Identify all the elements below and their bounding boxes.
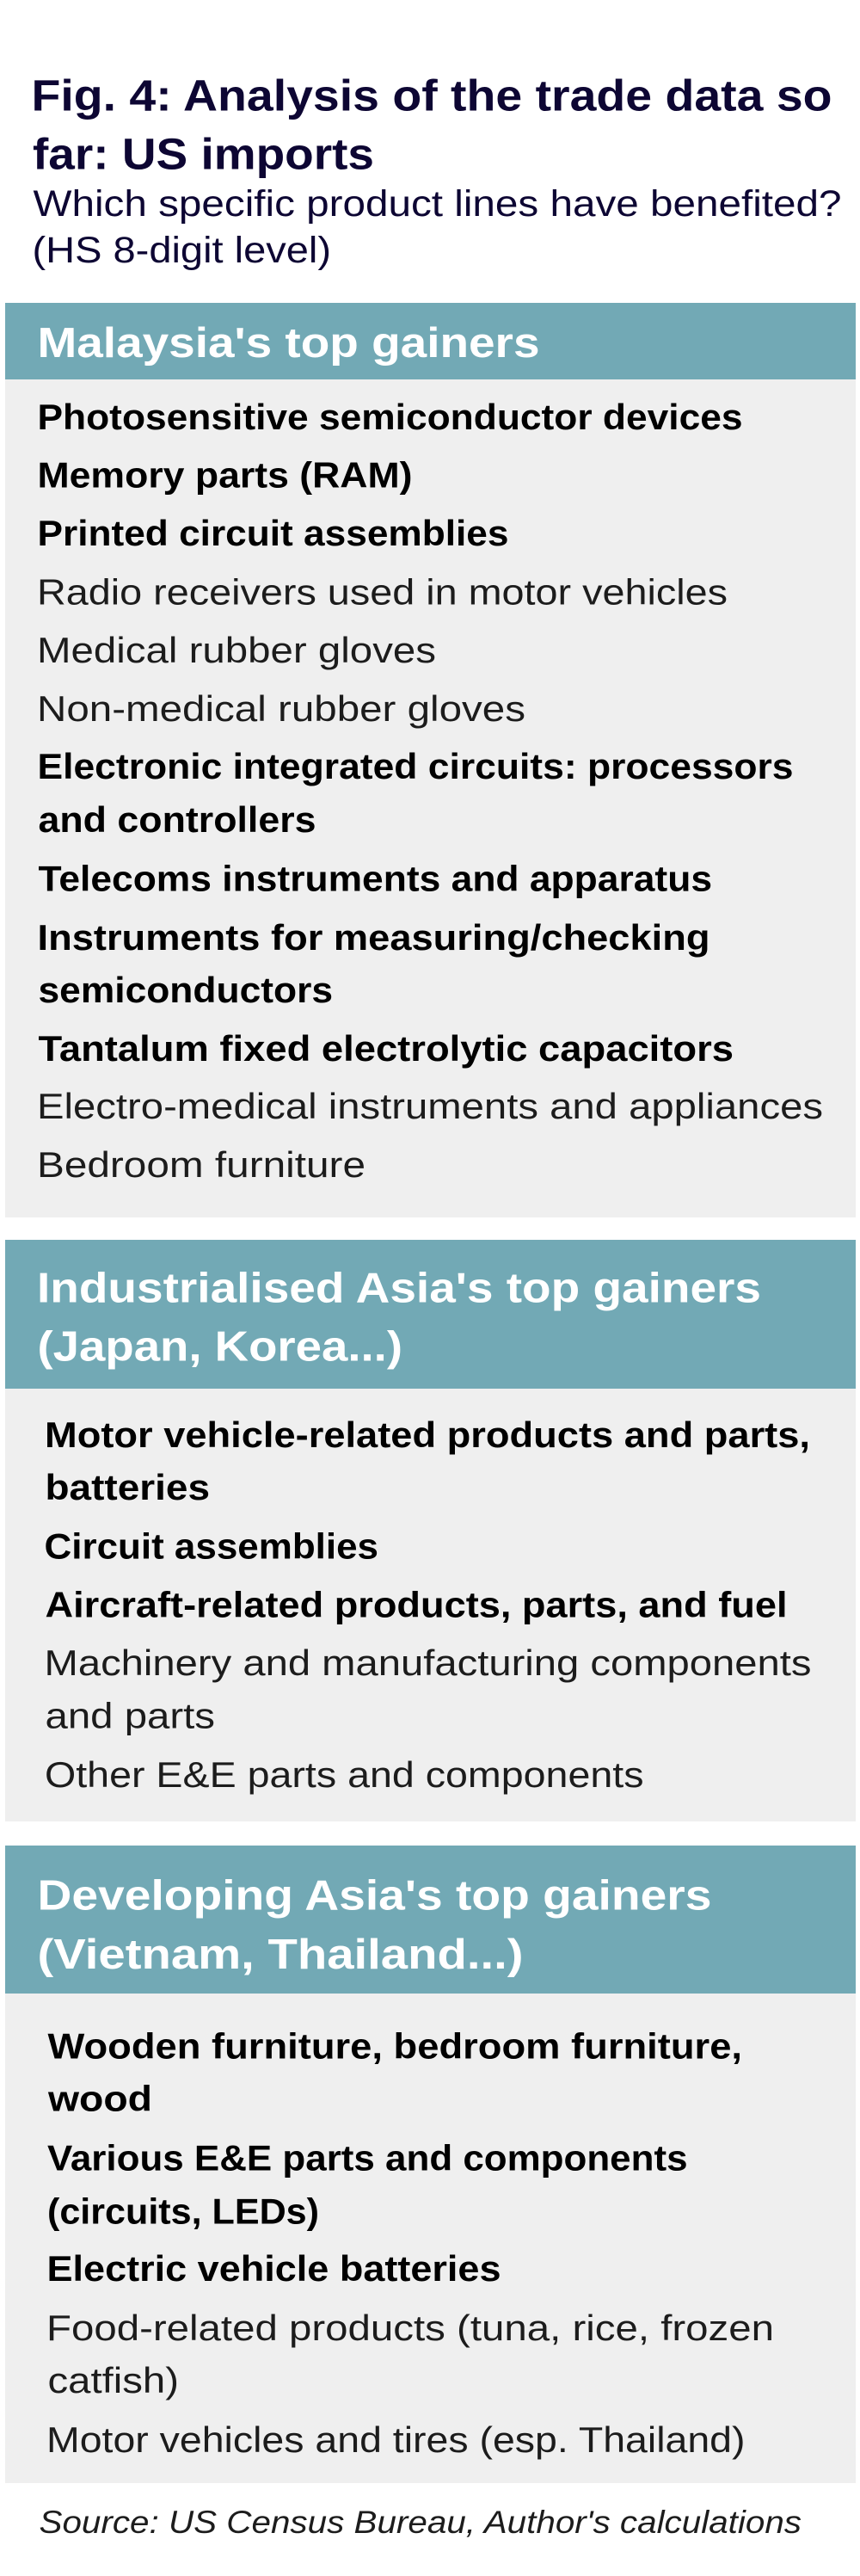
item: various E&E parts [47,2137,688,2232]
item: food-related products: Food-related products (tuna, rice, frozen [46,2308,774,2348]
title: far: US imports [33,129,374,179]
item: measuring instruments: Instruments for measuring/checking [38,917,710,958]
item: radio receivers: Radio receivers used in motor vehicles [37,571,728,613]
item: various E&E parts: (circuits, LEDs) [47,2191,319,2232]
panel header: Developing Asia: Developing Asia's top gainers [38,1872,711,1919]
item: bedroom furniture: Bedroom furniture [37,1144,366,1185]
item: motor vehicles and tires: Motor vehicles and tires (esp. Thailand) [46,2419,745,2460]
item: food-related products [46,2308,774,2400]
item: wooden furniture: wood [47,2079,152,2118]
item: memory parts: Memory parts (RAM) [38,454,413,496]
panel header: Industrialised Asia: Industrialised Asia's top gainers [37,1265,761,1311]
item: electronic integrated circuits [38,746,793,840]
panel header: Industrialised Asia [5,1240,856,1389]
item: aircraft products: Aircraft-related products, parts, and fuel [45,1585,788,1624]
item: various E&E parts: Various E&E parts and components [47,2137,688,2179]
item: machinery components [45,1642,812,1736]
item: wooden furniture [47,2025,742,2118]
title: Fig. 4: Analysis of the trade data so [31,71,832,120]
item: medical rubber gloves: Medical rubber gloves [37,630,436,670]
panel header: Malaysia [5,303,856,379]
item: non-medical rubber gloves: Non-medical rubber gloves [37,688,525,729]
item: other E&E parts: Other E&E parts and components [45,1754,643,1795]
item: electronic integrated circuits: and controllers [38,799,316,840]
item: photosensitive semiconductor devices: Photosensitive semiconductor devices [38,397,743,437]
item: electric vehicle batteries: Electric vehicle batteries [46,2248,501,2289]
title [31,71,832,179]
subtitle: (HS 8-digit level) [33,230,331,271]
item: circuit assemblies: Circuit assemblies [45,1526,378,1566]
panel: Industrialised Asia's top gainers [5,1240,856,1821]
item: telecoms instruments: Telecoms instruments and apparatus [38,859,712,898]
item: measuring instruments [38,917,710,1010]
panel header: Developing Asia [5,1846,856,1994]
panel: Malaysia's top gainers [5,303,856,1217]
source note: Source: US Census Bureau, Author's calculations [40,2505,802,2540]
item: measuring instruments: semiconductors [38,970,333,1010]
panel header: Malaysia: Malaysia's top gainers [38,320,540,367]
panel header: Industrialised Asia: (Japan, Korea...) [38,1323,402,1370]
item: motor vehicle products [45,1414,810,1507]
item: printed circuit assemblies: Printed circuit assemblies [38,513,509,553]
item: electronic integrated circuits: Electronic integrated circuits: processors [38,746,793,786]
item: wooden furniture: Wooden furniture, bedroom furniture, [48,2025,742,2067]
subtitle: Which specific product lines have benefited? [33,183,841,225]
panel header: Developing Asia: (Vietnam, Thailand...) [38,1932,523,1978]
item: food-related products: catfish) [48,2360,179,2400]
item: electro-medical instruments: Electro-medical instruments and appliances [37,1086,823,1126]
item: machinery components: and parts [45,1695,215,1736]
panel: Developing Asia's top gainers [5,1846,856,2483]
item: motor vehicle products: batteries [45,1467,210,1507]
item: tantalum capacitors: Tantalum fixed electrolytic capacitors [38,1028,734,1069]
item: machinery components: Machinery and manufacturing components [45,1642,812,1683]
subtitle [33,183,841,271]
item: motor vehicle products: Motor vehicle-related products and parts, [45,1414,810,1455]
